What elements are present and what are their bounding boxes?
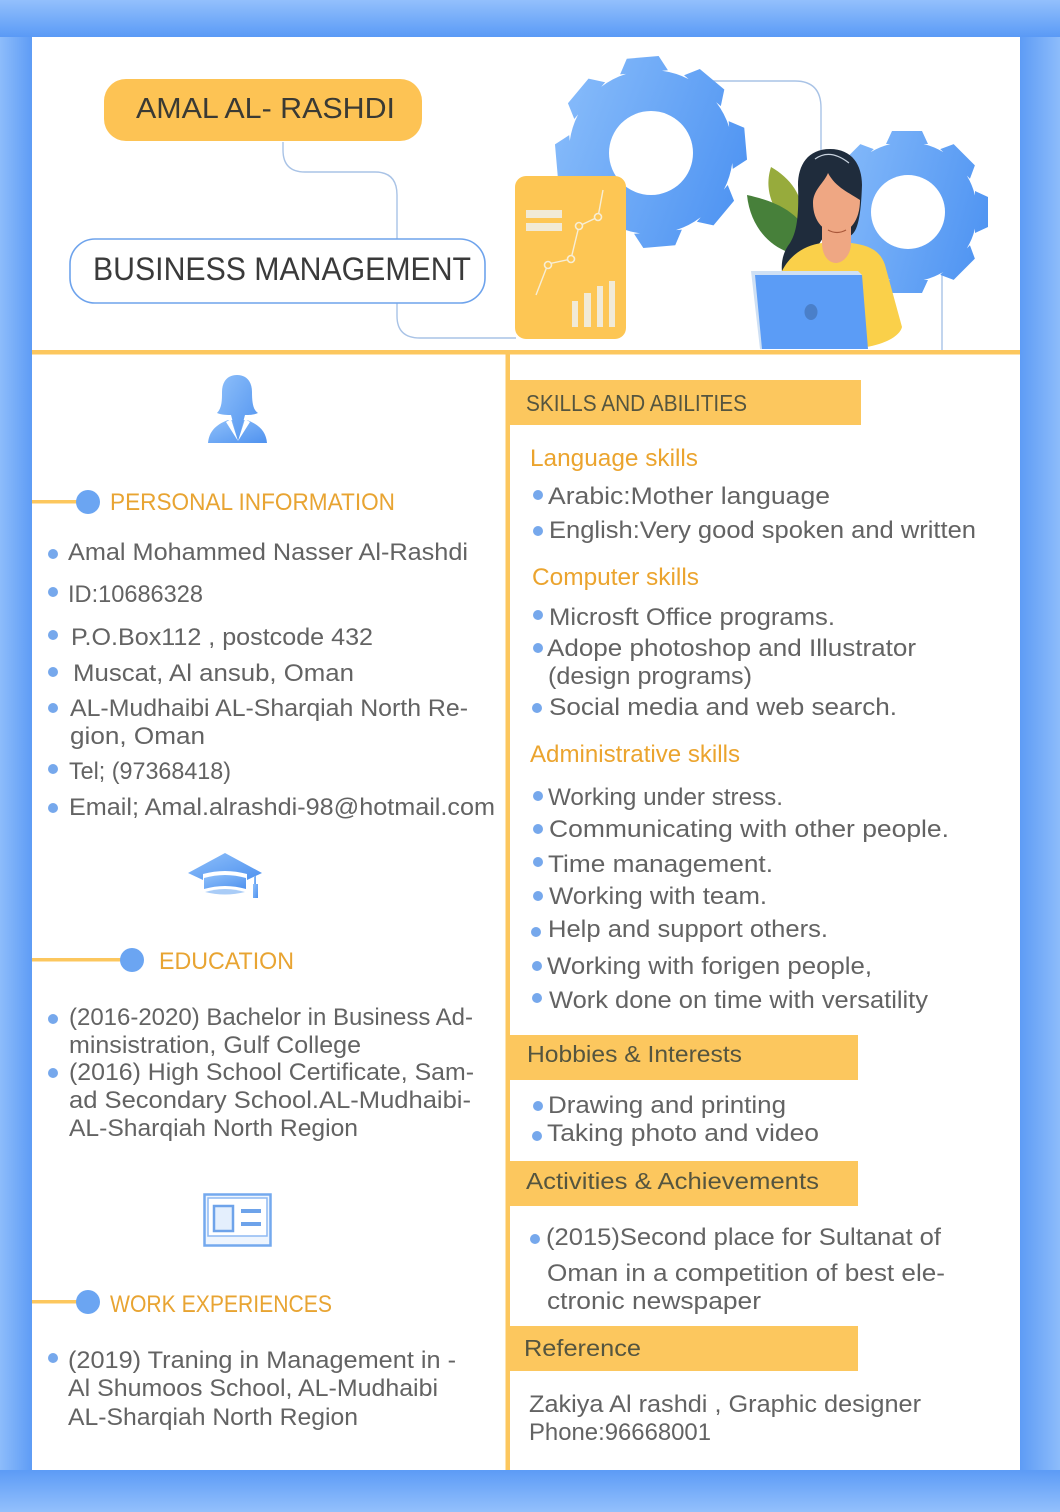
- heading: work experiences: [32, 1290, 332, 1318]
- personal details list: Muscat, Al ansub, Oman: [73, 660, 354, 687]
- panel: reference: [508, 1326, 921, 1446]
- education list: ad Secondary School.AL-Mudhaibi-: [69, 1087, 471, 1114]
- heading bar: hobbies: Hobbies & Interests: [527, 1041, 742, 1067]
- personal details list: Tel; (97368418): [69, 758, 231, 785]
- icon: chart card: [515, 176, 626, 339]
- heading bar: reference: Reference: [524, 1335, 641, 1361]
- icon: laptop: [751, 271, 868, 349]
- computer skills: Adope photoshop and Illustrator: [547, 635, 916, 662]
- icon: large gear: [550, 50, 750, 254]
- panel: hobbies and interests: [508, 1035, 858, 1147]
- education list: AL-Sharqiah North Region: [69, 1115, 358, 1142]
- computer skills: Microsft Office programs.: [549, 604, 835, 631]
- personal details list: gion, Oman: [70, 723, 205, 750]
- administrative skills: Administrative skills: [530, 741, 740, 768]
- work list: [48, 1347, 456, 1431]
- heading bar: reference: [508, 1326, 858, 1371]
- icon: id card: [204, 1194, 270, 1246]
- personal details list: AL-Mudhaibi AL-Sharqiah North Re-: [70, 695, 468, 722]
- heading bar: skills and abilities: SKILLS AND ABILITIES: [526, 390, 747, 416]
- language skills: Language skills: [530, 445, 698, 472]
- activities text: [530, 1224, 945, 1315]
- connector lines: [283, 81, 942, 350]
- personal details list: Email; Amal.alrashdi-98@hotmail.com: [69, 794, 495, 821]
- education list: minsistration, Gulf College: [69, 1032, 361, 1059]
- icon: small gear: [850, 131, 988, 293]
- job title pill: [70, 239, 485, 303]
- computer skills: Social media and web search.: [549, 694, 897, 721]
- reference text: Phone:96668001: [529, 1419, 711, 1446]
- administrative skills: Work done on time with versatility: [549, 987, 928, 1014]
- computer skills: [532, 564, 916, 721]
- activities text: Oman in a competition of best ele-: [547, 1260, 945, 1287]
- hobbies list: [532, 1092, 819, 1147]
- language skills: English:Very good spoken and written: [549, 517, 976, 544]
- personal details list: P.O.Box112 , postcode 432: [71, 624, 373, 651]
- administrative skills: Working with team.: [549, 883, 767, 910]
- administrative skills: Working under stress.: [548, 784, 783, 811]
- heading: education: [32, 948, 294, 975]
- administrative skills: Time management.: [548, 851, 773, 878]
- personal details list: ID:10686328: [68, 581, 203, 608]
- work list: (2019) Traning in Management in -: [68, 1347, 456, 1374]
- panel: work experiences: [32, 1194, 456, 1431]
- work list: Al Shumoos School, AL-Mudhaibi: [68, 1375, 438, 1402]
- education list: (2016-2020) Bachelor in Business Ad-: [69, 1004, 473, 1031]
- education list: (2016) High School Certificate, Sam-: [69, 1059, 474, 1086]
- name pill: [104, 79, 422, 141]
- administrative skills: Working with forigen people,: [547, 953, 872, 980]
- icon: person: [208, 375, 267, 443]
- personal details list: [48, 539, 495, 821]
- activities text: ctronic newspaper: [547, 1288, 761, 1315]
- illustration: gears and woman with laptop: [515, 50, 995, 349]
- heading: personal information: PERSONAL INFORMATION: [110, 489, 395, 516]
- heading: education: EDUCATION: [159, 948, 294, 975]
- language skills: Arabic:Mother language: [548, 483, 830, 510]
- layout rules: [32, 350, 1020, 1470]
- panel: activities and achievements: [508, 1161, 945, 1315]
- heading: work experiences: WORK EXPERIENCES: [110, 1291, 332, 1318]
- heading bar: hobbies: [508, 1035, 858, 1080]
- work list: AL-Sharqiah North Region: [68, 1404, 358, 1431]
- heading bar: skills and abilities: [508, 380, 861, 425]
- administrative skills: Help and support others.: [548, 916, 828, 943]
- computer skills: Computer skills: [532, 564, 699, 591]
- administrative skills: [530, 741, 949, 1014]
- reference text: Zakiya Al rashdi , Graphic designer: [529, 1391, 921, 1418]
- panel: education: [32, 853, 474, 1142]
- name pill: AMAL AL- RASHDI: [136, 93, 395, 125]
- administrative skills: Communicating with other people.: [549, 816, 949, 843]
- language skills: [530, 445, 976, 544]
- computer skills: (design programs): [548, 663, 752, 690]
- panel: personal information: [32, 375, 495, 821]
- heading bar: activities: [508, 1161, 858, 1206]
- hobbies list: Drawing and printing: [548, 1092, 786, 1119]
- heading bar: activities: Activities & Achievements: [526, 1168, 819, 1194]
- education list: [48, 1004, 474, 1142]
- panel: skills and abilities: [508, 380, 976, 1014]
- personal details list: Amal Mohammed Nasser Al-Rashdi: [68, 539, 468, 566]
- hobbies list: Taking photo and video: [547, 1120, 819, 1147]
- woman: [782, 149, 902, 347]
- job title pill: BUSINESS MANAGEMENT: [93, 251, 471, 287]
- reference text: [529, 1391, 921, 1446]
- activities text: (2015)Second place for Sultanat of: [546, 1224, 941, 1251]
- icon: leaves: [747, 167, 803, 252]
- icon: graduation cap: [188, 853, 262, 898]
